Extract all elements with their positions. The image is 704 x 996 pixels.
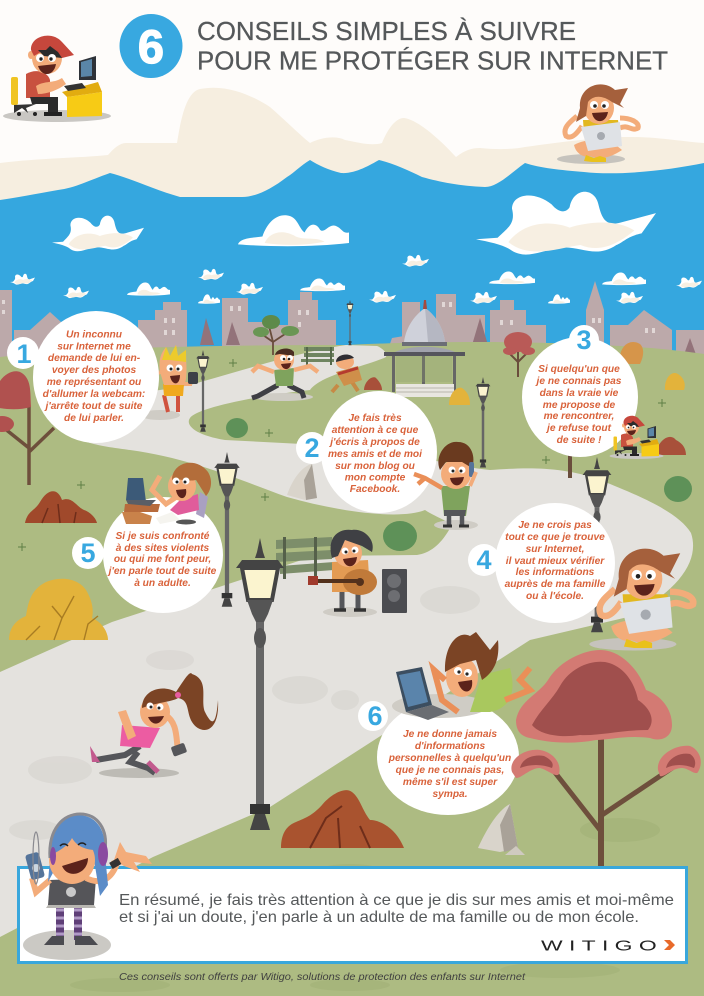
- bubble 3: dans la vraie vie: [540, 388, 619, 399]
- bubble 3: Si quelqu'un que: [538, 364, 620, 375]
- path texture: [9, 558, 544, 840]
- bubble 4: ou à l'école.: [526, 591, 584, 602]
- character: boy with guitar and speaker: [308, 530, 407, 617]
- large red tree: [511, 650, 701, 870]
- bubble 2: Facebook.: [350, 484, 400, 495]
- character: girl lying with laptop: [392, 632, 530, 720]
- shrub brown left: [25, 491, 97, 523]
- shrub yellow: [9, 579, 108, 640]
- city skyline: [0, 281, 704, 360]
- shrub brown large: [281, 790, 404, 848]
- bubble 5: Si je suis confronté: [116, 531, 210, 542]
- small tree near bench: [253, 315, 299, 355]
- bubble 3: me propose de: [543, 400, 616, 411]
- character: running man in green: [252, 348, 318, 401]
- bubble 5: 5: [80, 538, 96, 568]
- gazebo: [384, 300, 465, 397]
- lamp post beside bubble 3: [583, 457, 611, 632]
- character: summary girl with headphones: [23, 814, 152, 960]
- lamp posts small: [196, 300, 490, 468]
- bubble 6: 6: [367, 701, 383, 731]
- bubble 3: 3: [576, 325, 592, 355]
- bubble 5: à un adulte.: [134, 578, 191, 589]
- heading: number six badge: [120, 14, 182, 78]
- bubble 6: personnelles à quelqu'un: [388, 753, 511, 764]
- bubble 5: j'en parle tout de suite: [107, 566, 217, 577]
- left red tree: [0, 371, 54, 485]
- small bushes: [364, 342, 686, 455]
- bubble 6: [358, 699, 519, 815]
- witigo logo: [541, 938, 675, 954]
- bubble 2: 2: [304, 433, 320, 463]
- lamp post large: [236, 538, 284, 830]
- bubble 1: 1: [16, 339, 32, 369]
- bubble 3: je ne connais pas: [535, 376, 622, 387]
- character: blonde boy with phone: [140, 345, 198, 420]
- bubble 6: même s'il est super: [403, 777, 498, 788]
- bubble 2: sur mon blog ou: [335, 461, 416, 472]
- footer note: Ces conseils sont offerts par Witigo, solutions de protection des enfants sur Internet: [119, 971, 526, 983]
- bubble 2: Je fais très: [348, 413, 402, 424]
- heading: title: [197, 17, 668, 76]
- bubble 6: Je ne donne jamais: [403, 729, 497, 740]
- bubble 4: 4: [476, 545, 492, 575]
- small lawn flowers: [18, 359, 666, 551]
- icon: girl with laptop on cloud: [557, 84, 638, 164]
- bubble 3: de suite !: [557, 435, 602, 446]
- bubble 4: auprès de ma famille: [505, 579, 606, 590]
- bubble 4: tout ce que je trouve: [505, 532, 605, 543]
- bench large: [276, 537, 334, 579]
- bubble 2: j'écris à propos de: [328, 437, 420, 448]
- summary box: [18, 868, 686, 962]
- red tree far right: [503, 332, 535, 377]
- green round shrubs: [226, 418, 692, 551]
- witigo logo: WITIGO: [541, 938, 663, 954]
- bubble 4: [468, 503, 615, 623]
- cream top cloud band: [0, 88, 704, 200]
- bubble 1: j'arrête tout de suite: [44, 401, 143, 412]
- bubble 6: sympa.: [432, 789, 468, 800]
- heading: number six badge: 6: [138, 20, 164, 73]
- building windows: [2, 300, 655, 335]
- bubble 4: il vaut mieux vérifier: [506, 556, 605, 567]
- lawn texture: [70, 818, 660, 992]
- bubble 4: sur Internet,: [526, 544, 584, 555]
- big sky clouds: [52, 192, 656, 255]
- bubble 6: que je ne connais pas,: [396, 765, 504, 776]
- character: curly boy on the phone: [414, 442, 478, 530]
- bubble 1: me représentant ou: [47, 377, 142, 388]
- heading: title: POUR ME PROTÉGER SUR INTERNET: [197, 46, 668, 76]
- icon: boy at computer desk: [3, 36, 111, 122]
- bubble 6: d'informations: [415, 741, 485, 752]
- bubble 3: [522, 325, 638, 457]
- bubble 3: je refuse tout: [545, 423, 612, 434]
- rock: [287, 464, 317, 500]
- character: girl at laptop with pink top: [122, 463, 211, 524]
- character: running girl with phone: [90, 673, 218, 778]
- sky: [0, 152, 704, 360]
- summary text: et si j'ai un doute, j'en parle à un adulte de ma famille ou de mon école.: [119, 909, 639, 926]
- tree trunk below bubble 3: [568, 450, 572, 478]
- bubble 5: ou qui me font peur,: [114, 554, 211, 565]
- bubble 1: sur Internet me: [57, 342, 131, 352]
- bubble 1: d'allumer la webcam:: [43, 389, 145, 400]
- bubble 1: de lui parler.: [64, 413, 124, 424]
- heading: title: CONSEILS SIMPLES À SUIVRE: [197, 17, 576, 46]
- summary text: En résumé, je fais très attention à ce que je dis sur mes amis et moi-même: [119, 892, 674, 909]
- bubble 4: les informations: [516, 567, 595, 578]
- character: boy running with dog: [332, 355, 362, 392]
- bubble 1: demande de lui en-: [48, 353, 141, 364]
- bubble 2: mon compte: [345, 472, 406, 484]
- bubble 2: [296, 391, 437, 513]
- character: small boy at desk in park: [610, 416, 664, 459]
- bubble 4: Je ne crois pas: [518, 520, 592, 531]
- rock large: [478, 804, 525, 855]
- summary text: [119, 892, 674, 926]
- bubble 1: Un inconnu: [66, 330, 123, 340]
- bubble 2: mes amis et de moi: [328, 449, 422, 460]
- bubble 3: me rencontrer,: [544, 411, 614, 422]
- park lawn: [0, 342, 704, 996]
- walking path: [0, 345, 693, 937]
- bubble 5: à des sites violents: [116, 543, 210, 554]
- bubble 1: [7, 311, 159, 443]
- bench far: [301, 347, 334, 365]
- lamp post left: [214, 452, 240, 607]
- small sky clouds: [10, 255, 702, 304]
- character: girl with laptop on grass: [589, 549, 693, 651]
- bubble 5: [72, 497, 223, 613]
- bubble 2: attention à ce que: [332, 425, 419, 436]
- skyline spires: [200, 302, 698, 360]
- bubble 1: voyer des photos: [52, 365, 137, 376]
